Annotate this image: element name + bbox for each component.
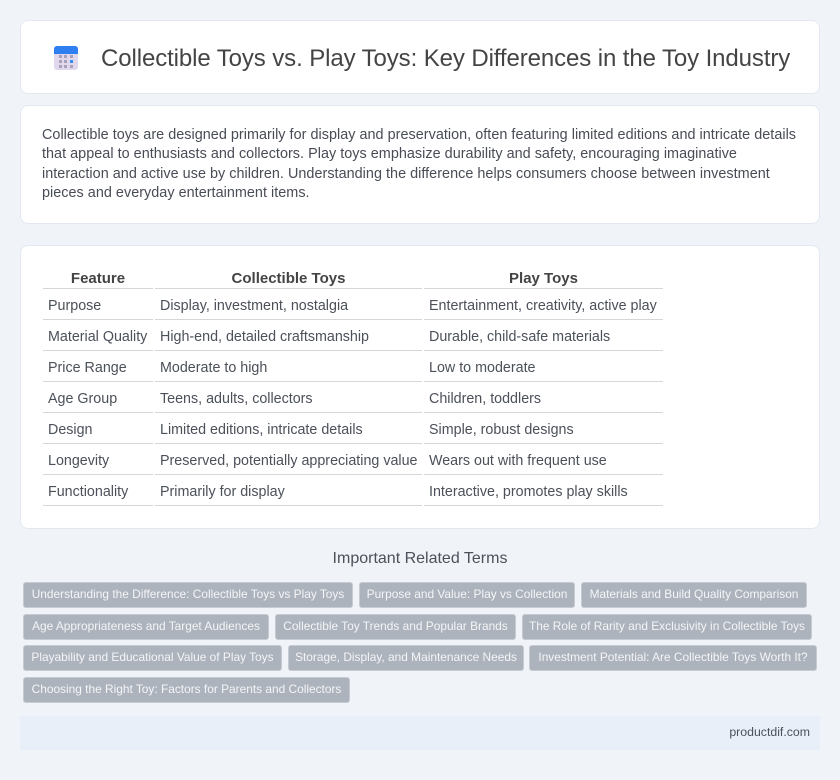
row: price range: Price Range (48, 360, 127, 376)
comparison table panel: Preserved, potentially appreciating value (160, 453, 418, 469)
related terms tags: Choosing the Right Toy: Factors for Parents and Collectors (32, 682, 341, 696)
related terms tags: Age Appropriateness and Target Audiences (32, 619, 260, 633)
intro text panel: pieces and everyday entertainment items. (42, 185, 310, 201)
row: functionality: Functionality (48, 484, 128, 500)
comparison table panel: Low to moderate (429, 360, 536, 376)
comparison table panel: Teens, adults, collectors (160, 391, 313, 407)
footer source text: productdif.com (729, 725, 810, 739)
related terms tags: Collectible Toy Trends and Popular Brands (283, 619, 508, 633)
related terms tags: Investment Potential: Are Collectible Toys Worth It? (538, 650, 808, 664)
comparison table panel: Interactive, promotes play skills (429, 484, 628, 500)
row: longevity: Longevity (48, 453, 109, 469)
comparison table panel (20, 245, 820, 529)
related terms heading: Important Related Terms (333, 550, 507, 567)
related terms tags: Playability and Educational Value of Play Toys (31, 650, 274, 664)
table header: feature: Feature (71, 270, 125, 287)
title: Collectible Toys vs. Play Toys: Key Differences in the Toy Industry (101, 45, 790, 72)
table header: collectible toys: Collectible Toys (232, 270, 345, 287)
comparison table panel: Display, investment, nostalgia (160, 298, 348, 314)
related terms tags (23, 582, 817, 703)
comparison table panel: Limited editions, intricate details (160, 422, 363, 438)
related terms tags: The Role of Rarity and Exclusivity in Collectible Toys (529, 619, 805, 633)
footer bar (20, 716, 820, 750)
related terms tags: Purpose and Value: Play vs Collection (367, 587, 567, 601)
intro text panel: Collectible toys are designed primarily for display and preservation, often featuring limited editions and intricate details (42, 127, 796, 143)
intro text panel: interaction and active use by children. Understanding the difference helps consumers choose between investment (42, 166, 770, 182)
related terms tags: Storage, Display, and Maintenance Needs (295, 650, 517, 664)
comparison table panel: Wears out with frequent use (429, 453, 607, 469)
row: purpose: Purpose (48, 298, 101, 314)
comparison table panel: Simple, robust designs (429, 422, 574, 438)
row: material quality: Material Quality (48, 329, 147, 345)
related terms tags: Understanding the Difference: Collectible Toys vs Play Toys (32, 587, 344, 601)
comparison table panel: Entertainment, creativity, active play (429, 298, 657, 314)
icon: calendar (54, 46, 78, 70)
comparison table panel: Durable, child-safe materials (429, 329, 610, 345)
row: design: Design (48, 422, 93, 438)
intro text panel (20, 105, 820, 224)
comparison table panel: High-end, detailed craftsmanship (160, 329, 369, 345)
comparison table panel: Children, toddlers (429, 391, 541, 407)
comparison table panel: Moderate to high (160, 360, 267, 376)
intro text panel: that appeal to enthusiasts and collectors. Play toys emphasize durability and safety, encouraging imaginative (42, 146, 737, 162)
related terms tags: Materials and Build Quality Comparison (590, 587, 798, 601)
comparison table panel: Primarily for display (160, 484, 285, 500)
table header: play toys: Play Toys (509, 270, 578, 287)
row: age group: Age Group (48, 391, 117, 407)
header card (20, 20, 820, 94)
